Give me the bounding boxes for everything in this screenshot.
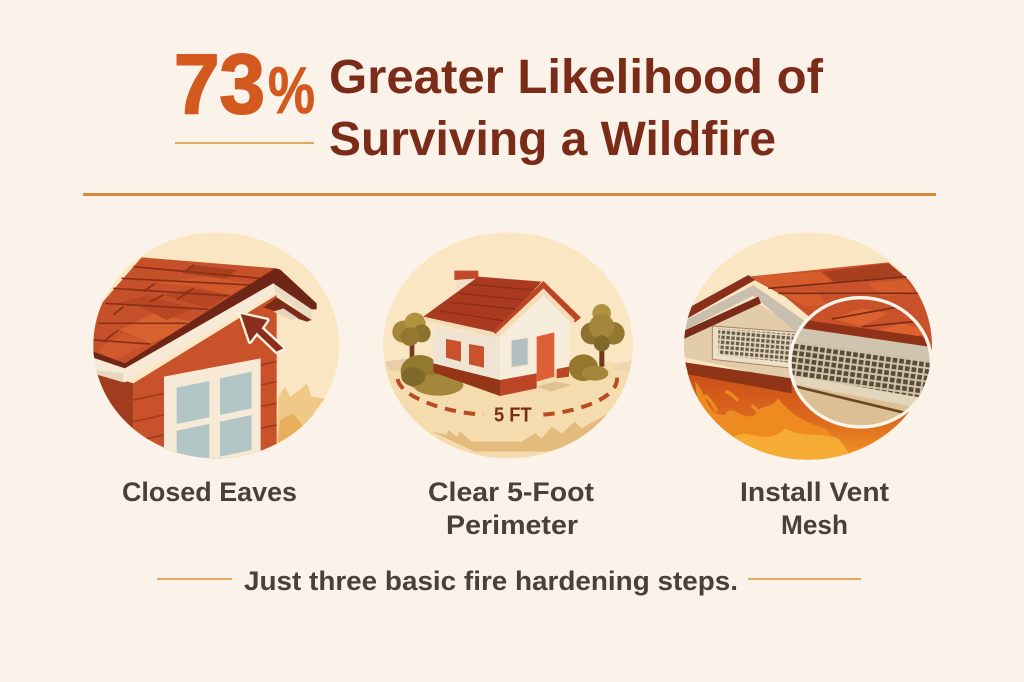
fascia band [685,362,792,393]
fire below the house [682,372,935,462]
heading text [329,51,824,166]
roof [90,257,277,365]
icon: house [423,271,581,396]
gable wall [684,304,914,410]
magnifier ring [790,298,931,427]
big statistic: 73% [174,37,315,131]
dashed 5 ft perimeter [398,378,617,415]
wall [90,295,277,460]
caption: clear 5-foot perimeter: Clear 5-Foot [428,477,594,507]
big statistic: 73%: 73 [174,37,265,131]
panel: closed eaves illustration [90,232,339,463]
ground [382,359,635,458]
big statistic: 73%: % [268,53,315,127]
caption: clear 5-foot perimeter: Perimeter [446,510,579,540]
roof [748,262,938,352]
vent grille [712,326,798,369]
label: 5 FT: 5 FT [494,404,532,427]
heading text: Greater Likelihood of [329,51,824,104]
title [174,37,824,166]
gable trim [682,275,808,340]
caption: closed eaves: Closed Eaves [122,477,297,507]
panel: 5-foot perimeter illustration [382,232,635,458]
icon: tree right [581,304,625,367]
fascia [90,268,317,382]
heading text: Surviving a Wildfire [329,113,776,166]
icon: tree left [392,313,431,363]
magnified inset [792,307,932,426]
icon: background flames [277,384,325,444]
window [164,358,261,463]
shrubs [401,354,608,396]
footer note: Just three basic fire hardening steps. [244,566,738,596]
caption: install vent mesh [740,477,889,540]
icon: pointing arrow [241,314,283,352]
panel: vent mesh illustration [682,232,938,462]
caption: clear 5-foot perimeter [428,477,594,540]
caption: install vent mesh: Install Vent [740,477,889,507]
dry grass [432,413,608,452]
caption: install vent mesh: Mesh [781,510,848,540]
